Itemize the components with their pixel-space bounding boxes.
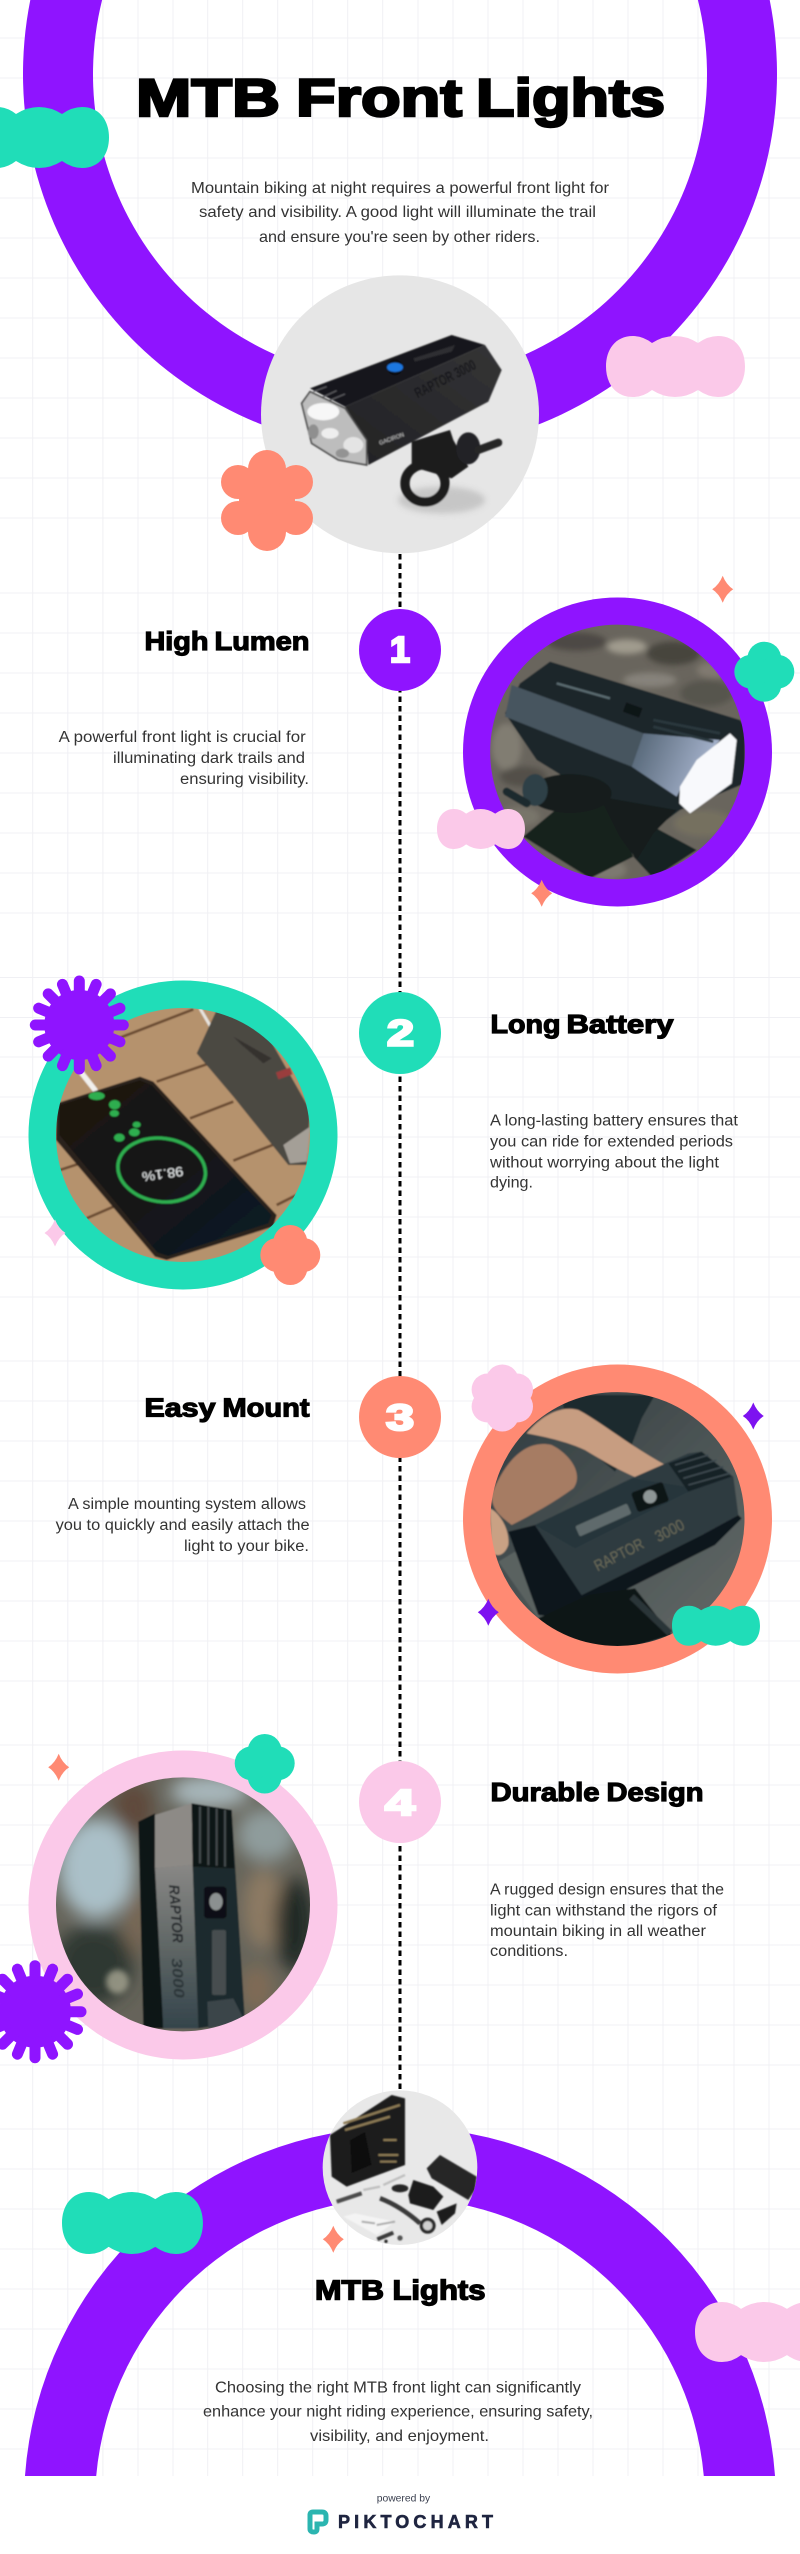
description: conditions. <box>490 1943 568 1960</box>
title: MTB <box>136 69 280 128</box>
grey light <box>197 1010 310 1165</box>
star bottom coral <box>531 880 552 907</box>
heading <box>490 1009 674 1039</box>
phone <box>56 1077 277 1260</box>
bottom mount <box>538 1588 672 1648</box>
number badge 3 <box>359 1376 441 1458</box>
photo ring coral <box>463 1364 772 1674</box>
bottom photo: kit contents <box>323 2090 477 2245</box>
wordmark: PIKTOCHART <box>338 2512 493 2532</box>
closing heading: Lights <box>392 2274 486 2306</box>
sunburst purple <box>0 1966 81 2058</box>
decorative blob: pink top right <box>606 336 745 397</box>
powered by: powered by <box>377 2492 431 2504</box>
clover teal <box>734 642 794 702</box>
closing heading <box>315 2274 486 2306</box>
photo: finger on light: RAPTOR <box>592 1536 647 1575</box>
description: light to your bike. <box>184 1538 309 1555</box>
closing text: Choosing the right MTB front light can significantly <box>215 2380 581 2397</box>
description: A powerful front light is crucial for <box>59 729 306 746</box>
heading: Mount <box>222 1392 310 1422</box>
photo: light on handlebar <box>487 623 750 883</box>
description: light can withstand the rigors of <box>490 1902 718 1919</box>
clover teal <box>235 1734 295 1794</box>
title: Lights <box>476 69 665 128</box>
bottom purple arch <box>25 2127 775 2476</box>
number badge 2 <box>359 992 441 1074</box>
number badge 1 <box>359 609 441 691</box>
description: without worrying about the light <box>489 1154 720 1171</box>
photo: upright light <box>53 1775 315 2035</box>
closing text: enhance your night riding experience, ensuring safety, <box>203 2404 593 2421</box>
decorative blob: teal top left <box>0 107 109 168</box>
number badge 1: 1 <box>390 629 410 670</box>
photo: finger on light <box>488 1392 748 1648</box>
heading <box>144 626 310 656</box>
kit light <box>427 2155 477 2200</box>
description: A simple mounting system allows <box>68 1496 306 1513</box>
blob teal bottom left <box>62 2192 203 2254</box>
heading <box>490 1777 704 1807</box>
number badge 2: 2 <box>387 1012 414 1054</box>
white cable <box>77 1067 95 1090</box>
photo: upright light: 3000 <box>168 1957 186 2000</box>
description: mountain biking in all weather <box>490 1923 706 1940</box>
intro text: safety and visibility. A good light will illuminate the trail <box>199 204 596 221</box>
description: ensuring visibility. <box>180 771 309 788</box>
description: you to quickly and easily attach the <box>56 1517 310 1534</box>
heading: Easy <box>144 1392 216 1422</box>
closing heading: MTB <box>315 2274 384 2306</box>
heading: Design <box>606 1777 704 1807</box>
star pink <box>44 1220 66 1246</box>
description: illuminating dark trails and <box>113 750 305 767</box>
description: you can ride for extended periods <box>490 1134 733 1150</box>
lit lens <box>679 733 737 813</box>
blob pink <box>437 809 525 849</box>
heading: High <box>144 626 208 656</box>
title <box>136 69 665 128</box>
photo ring purple <box>463 598 772 906</box>
intro text <box>191 180 610 246</box>
blob pink bottom right <box>695 2302 800 2362</box>
description: A long-lasting battery ensures that <box>490 1113 739 1130</box>
heading <box>144 1392 310 1422</box>
decorative flower: coral <box>221 450 313 551</box>
star top coral <box>712 576 733 603</box>
heading: Durable <box>490 1777 600 1807</box>
heading: Lumen <box>214 626 310 656</box>
intro text: Mountain biking at night requires a powerful front light for <box>191 180 610 197</box>
photo: phone charging <box>53 1007 313 1263</box>
accessories <box>337 2193 362 2202</box>
star coral bottom <box>323 2226 344 2253</box>
closing text <box>203 2380 593 2445</box>
number badge 4: 4 <box>385 1782 415 1823</box>
hand <box>492 1444 577 1525</box>
hero photo: bike light <box>261 275 539 553</box>
number badge 4 <box>359 1761 441 1843</box>
description <box>490 1881 724 1960</box>
section 4: Durable Design <box>0 1734 724 2060</box>
hero photo: bike light: RAPTOR 3000 <box>412 357 479 402</box>
star bottom purple <box>478 1599 499 1626</box>
light body <box>310 335 485 407</box>
light body <box>138 1813 163 2028</box>
top purple ring <box>23 0 777 451</box>
star top purple <box>743 1402 764 1430</box>
photo: upright light: RAPTOR <box>165 1884 185 1944</box>
number badge 3: 3 <box>386 1397 414 1438</box>
handlebar and clamp <box>523 800 633 878</box>
intro text: and ensure you're seen by other riders. <box>259 229 540 246</box>
heading: Long <box>490 1009 560 1039</box>
light body <box>508 1515 742 1618</box>
mount <box>412 430 468 478</box>
section 3: Easy Mount <box>56 1364 772 1674</box>
section 1: High Lumen <box>59 576 794 907</box>
section 2: Long Battery <box>28 980 739 1290</box>
timeline dotted line <box>398 554 402 2090</box>
description: dying. <box>490 1175 533 1192</box>
photo ring teal <box>28 980 338 1290</box>
photo: phone charging: 98.1% <box>141 1164 184 1184</box>
photo: finger on light: 3000 <box>652 1517 688 1546</box>
star coral <box>48 1754 69 1781</box>
description <box>56 1496 310 1555</box>
light body <box>505 662 745 830</box>
footer: powered by Piktochart <box>310 2492 493 2532</box>
charging ring <box>114 1133 210 1207</box>
photo ring pink <box>28 1750 338 2060</box>
title: Front <box>296 69 462 128</box>
lens <box>302 392 367 465</box>
description: A rugged design ensures that the <box>490 1881 724 1898</box>
closing text: visibility, and enjoyment. <box>310 2428 489 2445</box>
hero photo: bike light: GACIRON <box>379 432 405 447</box>
heading: Battery <box>566 1009 674 1039</box>
blue button <box>388 360 402 376</box>
description <box>59 729 309 788</box>
sunburst purple <box>35 981 123 1069</box>
blob teal <box>672 1606 760 1646</box>
flower pink <box>472 1364 533 1432</box>
icon: Piktochart logo <box>310 2512 326 2532</box>
clover coral <box>260 1225 320 1285</box>
description <box>489 1113 739 1192</box>
